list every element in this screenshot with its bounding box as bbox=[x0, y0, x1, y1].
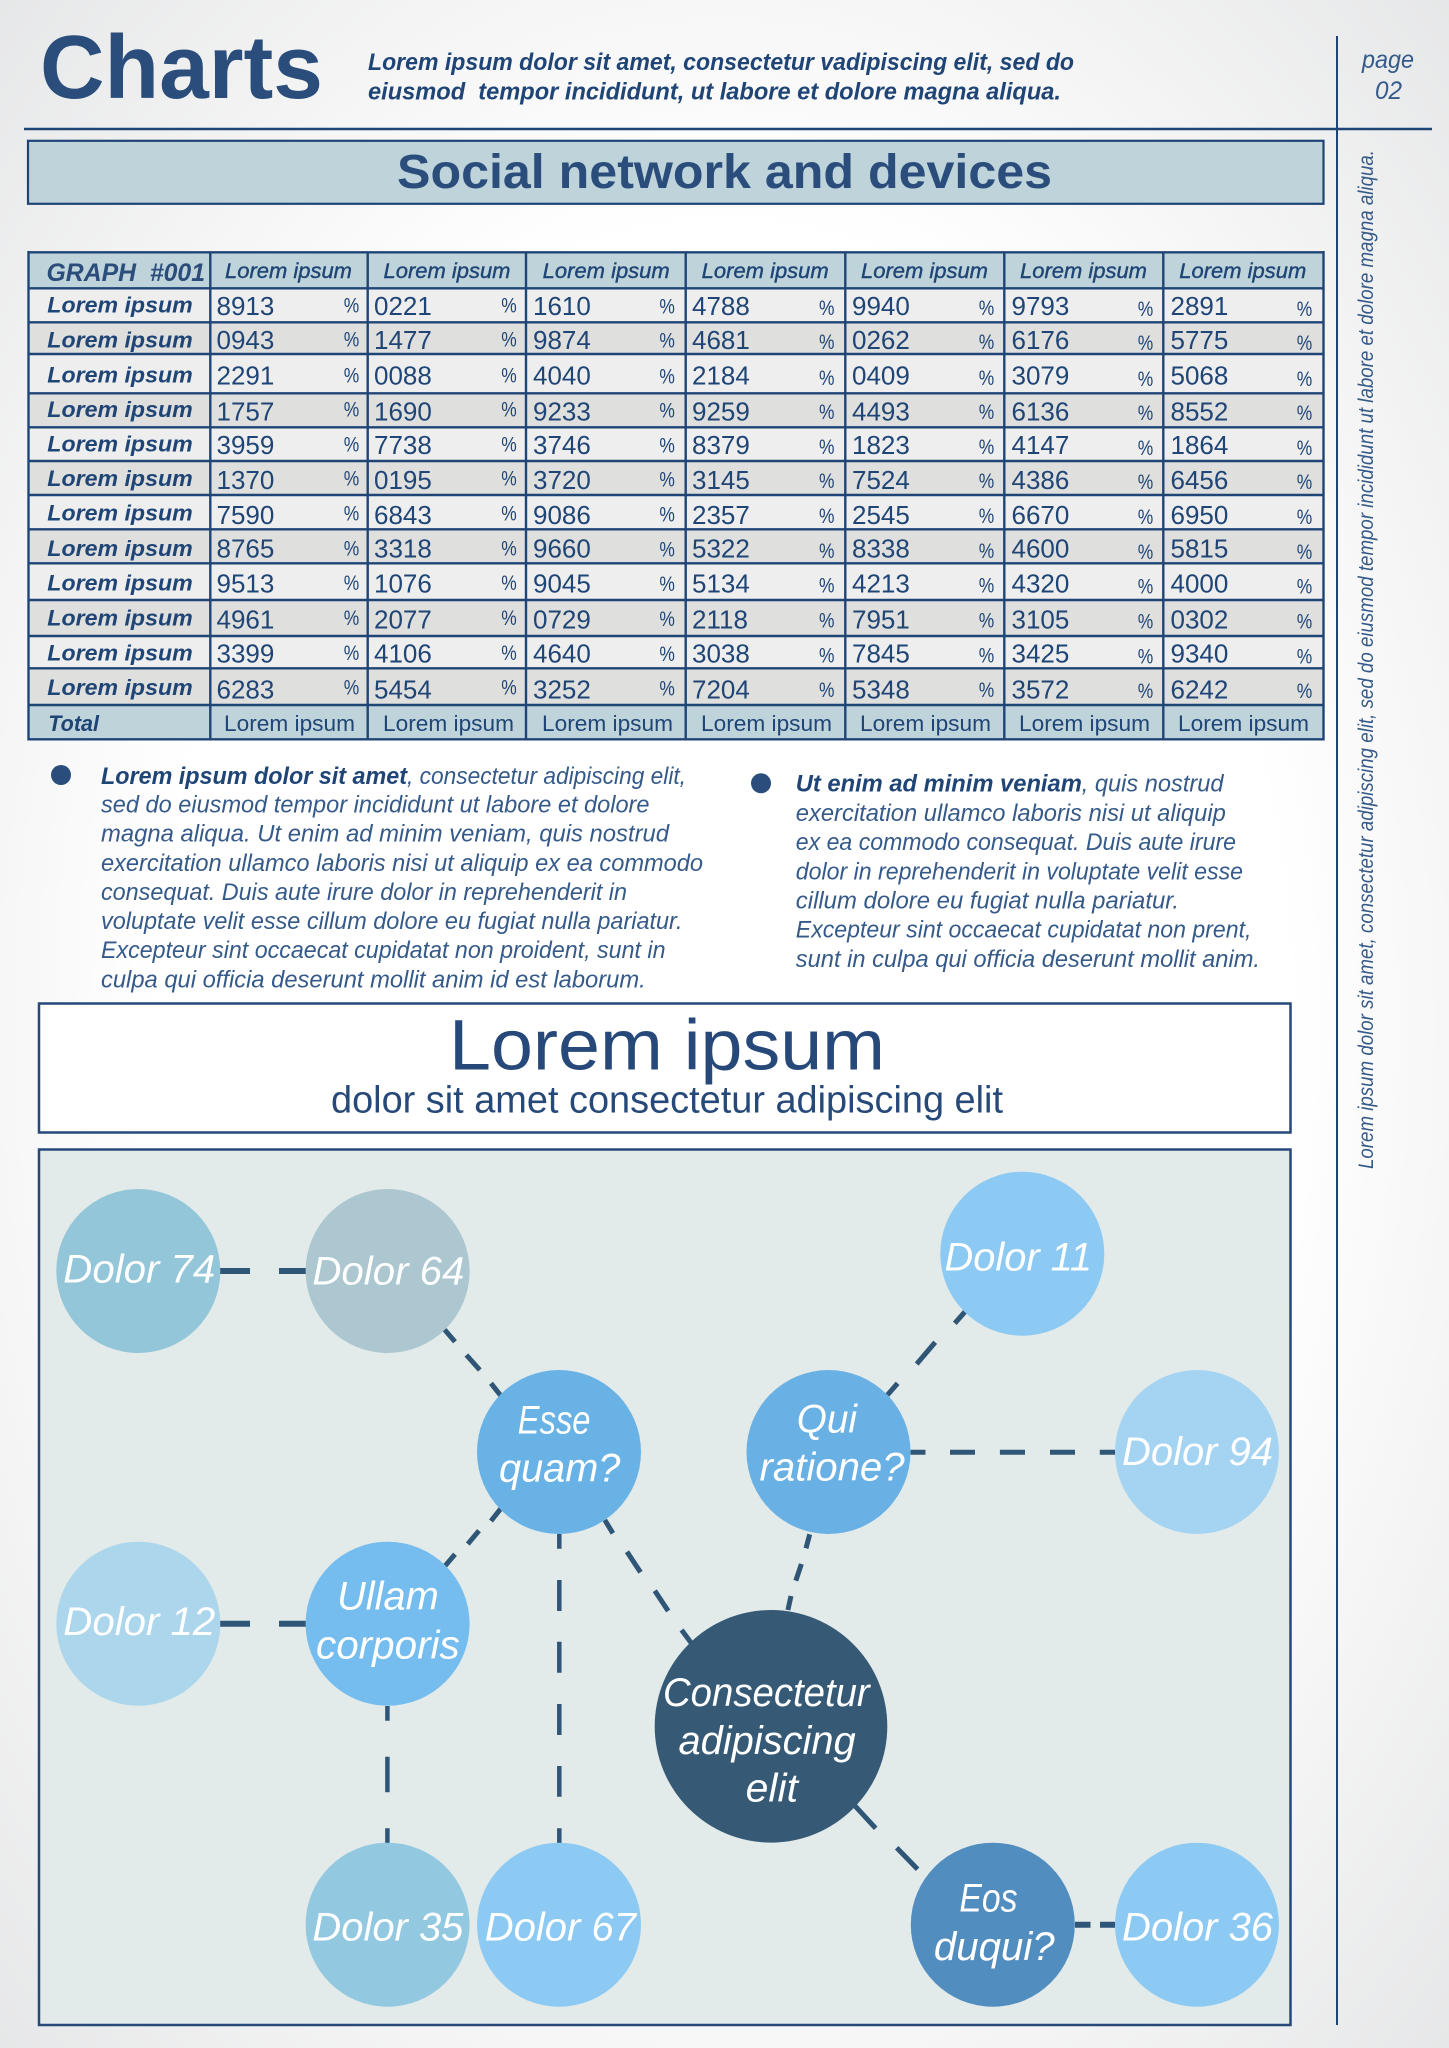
node: Dolor 94 bbox=[1115, 1370, 1279, 1534]
table row 11: % bbox=[659, 643, 675, 666]
table row 3: 0409 bbox=[852, 360, 910, 390]
table row 10: % bbox=[1138, 610, 1153, 634]
table row 10 bbox=[47, 604, 1312, 634]
table row 5: 7738 bbox=[374, 430, 432, 460]
table row 5: 8379 bbox=[692, 430, 750, 460]
table row 8: % bbox=[344, 538, 359, 561]
table row 11: % bbox=[501, 642, 517, 665]
table row 11: 3425 bbox=[1012, 639, 1069, 669]
table row 3: % bbox=[344, 364, 359, 387]
table row 6 bbox=[47, 465, 1312, 495]
table row 6: % bbox=[1138, 471, 1153, 494]
right text block: dolor in reprehenderit in voluptate velit esse bbox=[796, 858, 1243, 885]
node: Dolor 35: Dolor 35 bbox=[312, 1906, 464, 1950]
table row 6: 4386 bbox=[1012, 465, 1069, 495]
table row 9: 4320 bbox=[1012, 569, 1069, 599]
left text block: , consectetur adipiscing elit, bbox=[407, 763, 686, 790]
table row 10: 2077 bbox=[374, 604, 432, 634]
table row 2: % bbox=[659, 330, 675, 353]
table total row: Lorem ipsum bbox=[860, 711, 991, 736]
table header row bbox=[46, 259, 1306, 287]
right text block: cillum dolore eu fugiat nulla pariatur. bbox=[796, 888, 1179, 914]
table row 10: % bbox=[344, 607, 359, 630]
right text block bbox=[751, 771, 1260, 973]
table row 3: Lorem ipsum bbox=[47, 363, 193, 388]
table row 11: 9340 bbox=[1170, 639, 1228, 669]
table row 3: 2291 bbox=[216, 360, 274, 390]
table row 9: 4000 bbox=[1170, 569, 1228, 599]
table row 2: 5775 bbox=[1170, 325, 1228, 355]
table row 3: 4040 bbox=[533, 360, 591, 390]
table row 11: % bbox=[819, 644, 834, 668]
table row 1: % bbox=[501, 294, 517, 317]
connector: Esse quam to Dolor 67 bbox=[557, 1534, 562, 1843]
table row 10: % bbox=[659, 608, 675, 631]
table row 6: 3720 bbox=[533, 465, 591, 495]
table row 2: 1477 bbox=[374, 325, 432, 355]
table header row: Lorem ipsum bbox=[861, 260, 988, 283]
table row 9: Lorem ipsum bbox=[47, 571, 193, 596]
table row 4: % bbox=[1297, 402, 1312, 425]
table row 1: 9940 bbox=[852, 291, 910, 321]
table row 8: 8338 bbox=[852, 533, 910, 563]
table row 1 bbox=[47, 291, 1312, 321]
table row 2: % bbox=[1297, 332, 1312, 355]
table row 4: 6136 bbox=[1012, 397, 1069, 427]
page number: page bbox=[1361, 46, 1414, 74]
node: Dolor 36: Dolor 36 bbox=[1122, 1906, 1274, 1950]
table row 12: % bbox=[659, 677, 675, 700]
node: Qui ratione: Qui bbox=[797, 1398, 858, 1442]
node: Eos duqui: Eos bbox=[959, 1877, 1018, 1921]
table row 3: % bbox=[501, 364, 517, 387]
table row 12 bbox=[47, 674, 1312, 704]
table row 9: % bbox=[819, 574, 834, 598]
table row 1: % bbox=[979, 297, 994, 320]
left text block: culpa qui officia deserunt mollit anim id est laborum. bbox=[101, 966, 646, 993]
table row 1: Lorem ipsum bbox=[47, 293, 193, 318]
node: Dolor 67 bbox=[477, 1843, 641, 2007]
table row 6: 1370 bbox=[216, 465, 274, 495]
node: Ullam corporis: Ullam bbox=[337, 1574, 439, 1618]
table row 2: Lorem ipsum bbox=[47, 328, 193, 353]
node: Dolor 12 bbox=[56, 1542, 220, 1706]
table row 4: % bbox=[659, 400, 675, 423]
table row 9: % bbox=[501, 572, 517, 595]
table row 9: % bbox=[1297, 576, 1312, 598]
table row 1: % bbox=[1138, 298, 1153, 321]
table row 1: 0221 bbox=[374, 291, 432, 321]
table row 8: 3318 bbox=[374, 533, 432, 563]
node: Eos duqui: duqui? bbox=[934, 1925, 1055, 1969]
left text block bbox=[51, 763, 703, 993]
node: Dolor 11 bbox=[940, 1172, 1104, 1336]
table row 10: 0302 bbox=[1170, 604, 1228, 634]
table row 4: % bbox=[501, 399, 517, 422]
node: Dolor 64: Dolor 64 bbox=[312, 1249, 464, 1293]
table row 8: 8765 bbox=[216, 533, 274, 563]
node: Eos duqui bbox=[911, 1843, 1075, 2007]
table row 3: 2184 bbox=[692, 360, 750, 390]
node: Consectetur adipiscing elit bbox=[655, 1610, 887, 1843]
node: Consectetur adipiscing elit: elit bbox=[746, 1767, 800, 1811]
table row 11: 4640 bbox=[533, 639, 591, 669]
table row 8: 5815 bbox=[1170, 533, 1228, 563]
table row 1: 4788 bbox=[692, 291, 750, 321]
table row 2: 0943 bbox=[216, 325, 274, 355]
node: Dolor 12: Dolor 12 bbox=[63, 1600, 215, 1644]
table row 7: % bbox=[1297, 506, 1312, 529]
table row 6: 3145 bbox=[692, 465, 750, 495]
table row 10: % bbox=[819, 610, 834, 632]
table row 5: 1823 bbox=[852, 430, 910, 460]
table header row: Lorem ipsum bbox=[543, 260, 670, 283]
table row 11: % bbox=[1297, 646, 1312, 668]
table row 4: % bbox=[819, 401, 834, 424]
table row 2: % bbox=[1138, 332, 1153, 355]
node: Dolor 67: Dolor 67 bbox=[485, 1906, 638, 1950]
node: Esse quam: Esse bbox=[518, 1398, 590, 1442]
banner heading: Social network and devices bbox=[397, 146, 1052, 199]
table row 7: % bbox=[344, 503, 359, 526]
table row 4: % bbox=[979, 401, 994, 424]
table row 10: % bbox=[979, 610, 994, 632]
table row 6: % bbox=[344, 468, 359, 491]
table row 11: 3399 bbox=[216, 639, 274, 669]
table row 12: 5348 bbox=[852, 674, 910, 704]
table row 2: 6176 bbox=[1012, 325, 1069, 355]
table row 6: % bbox=[819, 470, 834, 493]
table row 8: % bbox=[1138, 541, 1153, 564]
table row 8: 9660 bbox=[533, 533, 591, 563]
node: Esse quam bbox=[477, 1370, 641, 1534]
table total row: Total bbox=[48, 711, 100, 736]
table row 11 bbox=[47, 639, 1312, 669]
table row 4: % bbox=[344, 399, 359, 422]
table row 11: % bbox=[1138, 646, 1153, 668]
left text block: sed do eiusmod tempor incididunt ut labore et dolore bbox=[101, 792, 650, 819]
table row 7: % bbox=[1138, 506, 1153, 529]
table row 4: % bbox=[1138, 402, 1153, 425]
right text block: exercitation ullamco laboris nisi ut aliquip bbox=[796, 800, 1226, 827]
connector: Esse quam to Consectetur bbox=[605, 1520, 691, 1643]
node: Ullam corporis: corporis bbox=[316, 1623, 460, 1667]
table row 5: % bbox=[1138, 437, 1153, 460]
table row 1: % bbox=[344, 294, 359, 317]
table row 1: % bbox=[819, 297, 834, 320]
table row 8: % bbox=[501, 538, 517, 561]
right text block: ex ea commodo consequat. Duis aute irure bbox=[796, 829, 1236, 856]
table row 3: % bbox=[979, 367, 994, 390]
table row 10: % bbox=[1297, 610, 1312, 634]
table row 5: 1864 bbox=[1170, 430, 1228, 460]
node: Consectetur adipiscing elit: adipiscing bbox=[678, 1719, 856, 1763]
table row 9: % bbox=[1138, 576, 1153, 598]
table row 3: 3079 bbox=[1012, 360, 1069, 390]
table row 12: % bbox=[979, 679, 994, 702]
table row 7: % bbox=[659, 504, 675, 527]
node: Qui ratione bbox=[746, 1370, 910, 1534]
table row 6: % bbox=[659, 469, 675, 492]
right text block: , quis nostrud bbox=[1082, 771, 1224, 798]
table row 1: % bbox=[1297, 298, 1312, 321]
table row 2: 9874 bbox=[533, 325, 591, 355]
table total row: Lorem ipsum bbox=[1178, 711, 1309, 736]
bullet left bbox=[51, 765, 71, 785]
node: Consectetur adipiscing elit: Consectetur bbox=[663, 1671, 871, 1715]
table row 7: 6843 bbox=[374, 500, 432, 530]
table row 4: 1757 bbox=[216, 397, 274, 427]
table row 12: 7204 bbox=[692, 674, 750, 704]
table row 11: 4106 bbox=[374, 639, 432, 669]
table row 7: 6950 bbox=[1170, 500, 1228, 530]
table row 2: % bbox=[501, 329, 517, 352]
connector: Dolor 74 to Dolor 64 bbox=[220, 1268, 306, 1274]
table row 4 bbox=[47, 397, 1312, 427]
table row 2: 4681 bbox=[692, 325, 750, 355]
left text block: magna aliqua. Ut enim ad minim veniam, quis nostrud bbox=[101, 821, 670, 848]
table row 4: 9259 bbox=[692, 397, 750, 427]
table row 9: 4213 bbox=[852, 569, 910, 599]
table row 11: Lorem ipsum bbox=[47, 641, 193, 666]
table row 8: % bbox=[979, 540, 994, 563]
table total row: Lorem ipsum bbox=[383, 711, 514, 736]
table row 10: 2118 bbox=[692, 604, 748, 634]
node: Dolor 94: Dolor 94 bbox=[1122, 1430, 1273, 1474]
data table bbox=[28, 251, 1324, 740]
table row 5 bbox=[47, 430, 1312, 460]
connector: Qui ratione to Dolor 11 bbox=[887, 1312, 965, 1395]
table row 6: % bbox=[979, 470, 994, 493]
table row 12: % bbox=[344, 676, 359, 699]
left text block: consequat. Duis aute irure dolor in reprehenderit in bbox=[101, 879, 627, 906]
table row 6: % bbox=[1297, 471, 1312, 494]
table row 4: 8552 bbox=[1170, 397, 1228, 427]
table total row: Lorem ipsum bbox=[1019, 711, 1150, 736]
node: Dolor 36 bbox=[1115, 1843, 1279, 2007]
table row 8: % bbox=[659, 539, 675, 562]
table header row: GRAPH #001 bbox=[46, 259, 205, 287]
table row 12: 3572 bbox=[1012, 674, 1069, 704]
table row 9: % bbox=[979, 574, 994, 598]
page number bbox=[1361, 46, 1414, 105]
table row 12: 5454 bbox=[374, 674, 432, 704]
table row 8: 5322 bbox=[692, 533, 750, 563]
table row 9: 9045 bbox=[533, 569, 591, 599]
table row 5: 3746 bbox=[533, 430, 591, 460]
heading main text: Lorem ipsum bbox=[449, 1006, 885, 1086]
table row 5: % bbox=[979, 436, 994, 459]
table row 4: 1690 bbox=[374, 397, 432, 427]
table row 3: % bbox=[1297, 368, 1312, 391]
table total row: Lorem ipsum bbox=[224, 711, 355, 736]
table row 11: % bbox=[344, 642, 359, 665]
header description: Lorem ipsum dolor sit amet, consectetur vadipiscing elit, sed do bbox=[368, 49, 1074, 76]
table row 9: 9513 bbox=[216, 569, 274, 599]
table row 5: % bbox=[659, 435, 675, 458]
table row 1: 8913 bbox=[216, 291, 274, 321]
table row 1: % bbox=[659, 295, 675, 318]
table row 12: % bbox=[1138, 680, 1153, 703]
table row 9: % bbox=[659, 573, 675, 596]
right text block: sunt in culpa qui officia deserunt mollit anim. bbox=[796, 946, 1260, 973]
table row 4: 4493 bbox=[852, 397, 910, 427]
table row 10: 7951 bbox=[852, 604, 910, 634]
header description bbox=[368, 49, 1074, 105]
table row 5: % bbox=[819, 436, 834, 459]
table row 3: % bbox=[659, 365, 675, 388]
header description: eiusmod tempor incididunt, ut labore et dolore magna aliqua. bbox=[368, 78, 1061, 105]
connector: Eos duqui to Dolor 36 bbox=[1075, 1922, 1115, 1928]
table row 10: 0729 bbox=[533, 604, 591, 634]
table header row: Lorem ipsum bbox=[702, 260, 829, 283]
table row 7: % bbox=[979, 505, 994, 528]
table row 2: % bbox=[819, 331, 834, 354]
table header row: Lorem ipsum bbox=[225, 260, 352, 283]
table row 7: % bbox=[501, 503, 517, 526]
table row 7: 6670 bbox=[1012, 500, 1069, 530]
node: Dolor 64 bbox=[306, 1189, 470, 1353]
table row 12: % bbox=[1297, 680, 1312, 703]
table row 3: % bbox=[1138, 368, 1153, 391]
right text block: Ut enim ad minim veniam bbox=[796, 771, 1082, 798]
table row 2: % bbox=[979, 331, 994, 354]
table row 7: Lorem ipsum bbox=[47, 501, 193, 526]
table row 7: 2357 bbox=[692, 500, 750, 530]
vertical side text: Lorem ipsum dolor sit amet, consectetur adipiscing elit, sed do eiusmod tempor incididunt ut labore et dolore magna aliqua. bbox=[1355, 150, 1378, 1169]
table row 8: 4600 bbox=[1012, 533, 1069, 563]
table row 1: 9793 bbox=[1012, 291, 1069, 321]
table row 9: 1076 bbox=[374, 569, 432, 599]
table row 9: 5134 bbox=[692, 569, 750, 599]
table row 5: 3959 bbox=[216, 430, 274, 460]
table row 12: % bbox=[819, 679, 834, 702]
left text block: Excepteur sint occaecat cupidatat non proident, sunt in bbox=[101, 937, 666, 964]
node: Esse quam: quam? bbox=[499, 1447, 621, 1491]
node: Qui ratione: ratione? bbox=[760, 1446, 905, 1490]
node: Dolor 74: Dolor 74 bbox=[63, 1248, 215, 1292]
table row 8 bbox=[47, 533, 1312, 564]
node: Ullam corporis bbox=[306, 1542, 470, 1706]
left text block: exercitation ullamco laboris nisi ut aliquip ex ea commodo bbox=[101, 850, 703, 877]
table row 8: Lorem ipsum bbox=[47, 536, 193, 561]
table row 3: 5068 bbox=[1170, 360, 1228, 390]
table row 3: 0088 bbox=[374, 360, 432, 390]
connector: Ullam corporis to Dolor 35 bbox=[385, 1706, 390, 1843]
table row 3 bbox=[47, 360, 1312, 391]
table row 7: % bbox=[819, 505, 834, 528]
connector: Consectetur to Eos duqui bbox=[855, 1806, 918, 1869]
bullet right bbox=[751, 773, 771, 793]
table header row: Lorem ipsum bbox=[384, 260, 510, 283]
table total row bbox=[48, 711, 1309, 736]
table total row: Lorem ipsum bbox=[542, 711, 673, 736]
table row 11: % bbox=[979, 644, 994, 668]
heading box bbox=[39, 1004, 1290, 1132]
table row 9: % bbox=[344, 572, 359, 595]
table row 6: 0195 bbox=[374, 465, 432, 495]
table row 9 bbox=[47, 569, 1312, 599]
table row 10: % bbox=[501, 607, 517, 630]
chart panel bbox=[39, 1150, 1290, 2025]
table row 2: % bbox=[344, 329, 359, 352]
table row 7: 2545 bbox=[852, 500, 910, 530]
table row 12: 6242 bbox=[1170, 674, 1228, 704]
table row 8: % bbox=[819, 540, 834, 563]
title: Charts bbox=[40, 18, 323, 118]
table row 12: % bbox=[501, 676, 517, 699]
table row 1: 1610 bbox=[533, 291, 591, 321]
table row 5: Lorem ipsum bbox=[47, 432, 193, 457]
table row 5: 4147 bbox=[1012, 430, 1069, 460]
table row 6: 6456 bbox=[1170, 465, 1228, 495]
right text block: Excepteur sint occaecat cupidatat non prent, bbox=[796, 917, 1251, 944]
table row 11: 3038 bbox=[692, 639, 750, 669]
table row 2 bbox=[47, 325, 1312, 355]
connector: Qui ratione to Consectetur bbox=[788, 1534, 810, 1610]
table header row: Lorem ipsum bbox=[1020, 260, 1147, 283]
table row 10: 3105 bbox=[1012, 604, 1069, 634]
node: Dolor 35 bbox=[306, 1843, 470, 2007]
connector: Dolor 64 to Esse quam bbox=[444, 1329, 501, 1396]
node: Dolor 74 bbox=[56, 1189, 220, 1353]
heading sub text: dolor sit amet consectetur adipiscing elit bbox=[331, 1080, 1003, 1122]
table header row: Lorem ipsum bbox=[1179, 260, 1306, 283]
table row 5: % bbox=[344, 434, 359, 457]
connector: Qui ratione to Dolor 94 bbox=[911, 1450, 1115, 1455]
table row 4: Lorem ipsum bbox=[47, 397, 193, 422]
table row 1: 2891 bbox=[1170, 291, 1228, 321]
table row 12: 6283 bbox=[216, 674, 274, 704]
table row 11: 7845 bbox=[852, 639, 910, 669]
table total row: Lorem ipsum bbox=[701, 711, 832, 736]
table row 6: % bbox=[501, 468, 517, 491]
table row 10: 4961 bbox=[216, 604, 274, 634]
table row 12: 3252 bbox=[533, 674, 591, 704]
page number: 02 bbox=[1375, 77, 1402, 105]
table row 4: 9233 bbox=[533, 397, 591, 427]
table row 6: Lorem ipsum bbox=[47, 466, 193, 491]
table row 12: Lorem ipsum bbox=[47, 675, 193, 700]
table row 8: % bbox=[1297, 541, 1312, 564]
table row 10: Lorem ipsum bbox=[47, 606, 193, 631]
table row 7 bbox=[47, 500, 1312, 530]
table row 6: 7524 bbox=[852, 465, 910, 495]
table row 2: 0262 bbox=[852, 325, 910, 355]
left text block: voluptate velit esse cillum dolore eu fugiat nulla pariatur. bbox=[101, 908, 682, 935]
table row 5: % bbox=[1297, 437, 1312, 460]
connector: Dolor 12 to Ullam corporis bbox=[220, 1621, 306, 1627]
table row 7: 9086 bbox=[533, 500, 591, 530]
table row 5: % bbox=[501, 434, 517, 457]
left text block: Lorem ipsum dolor sit amet bbox=[101, 763, 408, 790]
node: Dolor 11: Dolor 11 bbox=[944, 1236, 1092, 1280]
table row 7: 7590 bbox=[216, 500, 274, 530]
section banner bbox=[28, 141, 1324, 204]
connector: Esse quam to Ullam corporis bbox=[445, 1508, 501, 1566]
table row 3: % bbox=[819, 367, 834, 390]
